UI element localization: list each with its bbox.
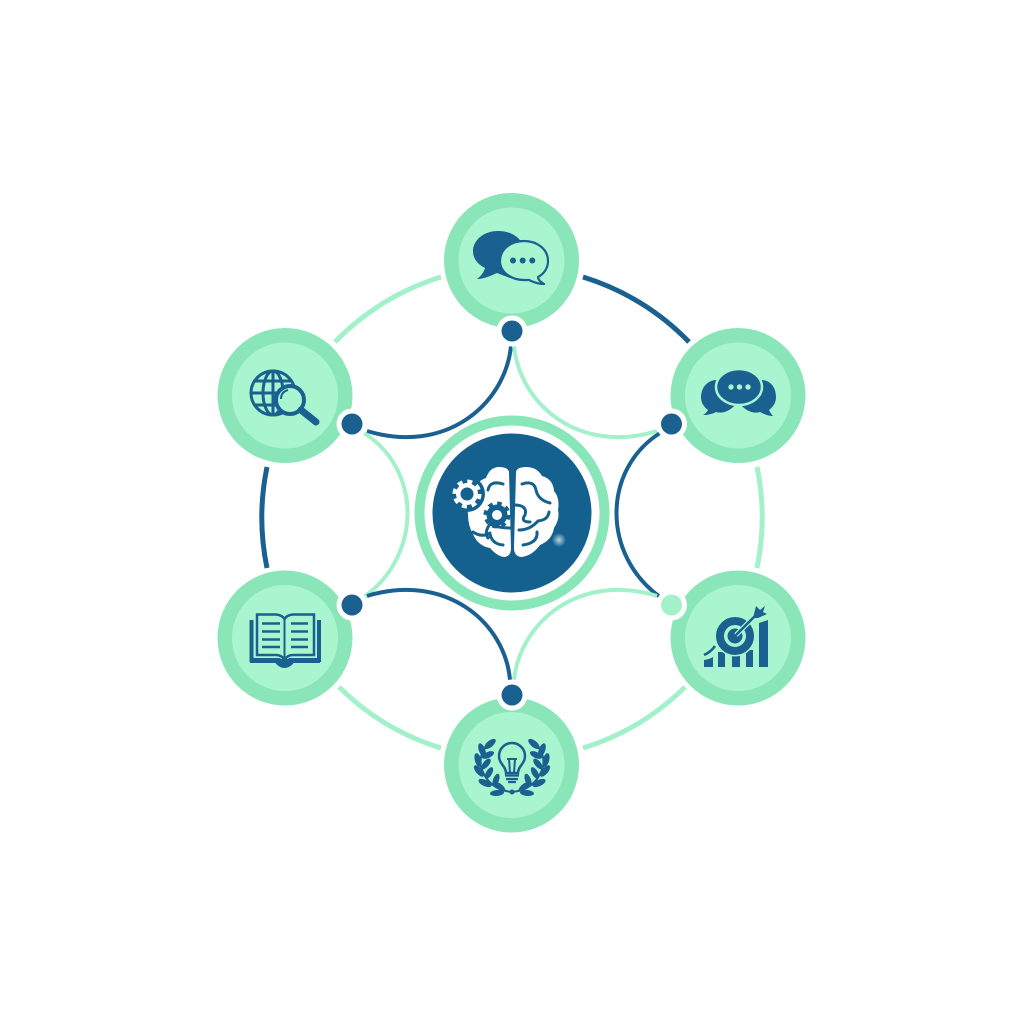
inner connecting curves xyxy=(364,346,660,680)
icon: open book xyxy=(250,614,320,666)
icon: brain left half xyxy=(468,467,511,557)
icon: globe with magnifier xyxy=(251,371,316,422)
node: lower right target xyxy=(670,570,806,706)
icon: small gear xyxy=(486,504,508,526)
icon: chat bubbles xyxy=(473,231,548,284)
icon: three speech bubbles xyxy=(701,369,776,416)
node: top chat xyxy=(444,193,579,328)
icon: brain right half xyxy=(514,467,558,557)
icon: large gear xyxy=(449,476,485,512)
node: lower left book xyxy=(218,570,352,706)
node: bottom idea laurel xyxy=(444,698,579,832)
center hub: brain with gears xyxy=(420,420,604,606)
icon: target and bars xyxy=(704,606,768,667)
junction dots xyxy=(336,316,687,710)
node: upper right discussion xyxy=(670,328,806,463)
node: upper left search xyxy=(218,328,352,463)
outer ring arcs xyxy=(262,277,762,748)
highlight spot xyxy=(552,533,566,547)
icon: lightbulb in laurel wreath xyxy=(472,737,552,797)
